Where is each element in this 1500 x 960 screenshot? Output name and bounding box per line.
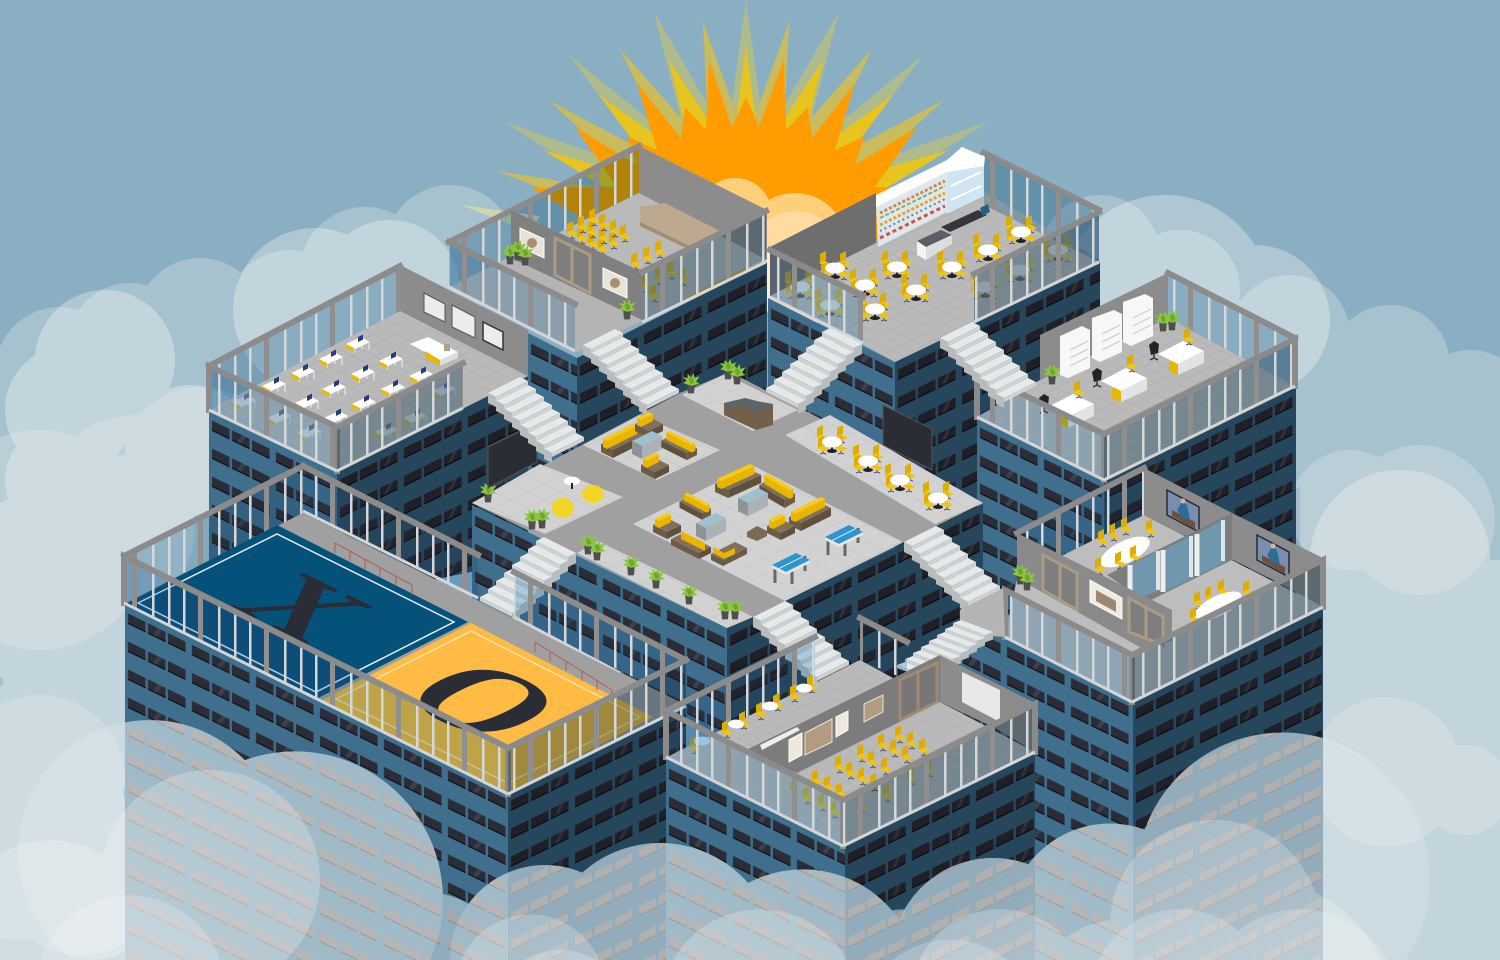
seminar chairs [789,725,936,818]
planter strip [577,541,753,628]
cafe tables [784,215,1074,321]
red safety rail one [335,543,412,595]
short olive rays [497,22,944,224]
plaza plants [480,359,746,619]
left wall [125,603,508,960]
reception desk [724,398,773,430]
office floor [209,311,528,471]
display cabinet [947,147,985,214]
video screen one [1167,490,1199,532]
stairs to seminar block [897,620,993,684]
left wall [666,758,845,960]
back glass railing [124,466,303,603]
back wall [1144,468,1323,607]
roof walkway overlay [283,513,640,692]
sun with rays [461,0,987,326]
back glass [1017,468,1144,578]
stage podium [640,203,722,250]
block: computer office (left) [209,265,528,600]
room two table [1189,579,1254,626]
back wall and whiteboards [400,265,528,376]
right wall of cafe block [895,262,1100,560]
left terrace [472,464,623,534]
back railing [209,266,400,410]
left railing [666,711,843,846]
partition with glazed shelves [1107,513,1232,602]
cafe floor [770,192,1100,362]
room one table [1094,517,1157,575]
orange roof pad [322,623,653,793]
plaza right wall [727,504,983,740]
letter O on roof: O [366,643,602,758]
back wall [1040,273,1168,380]
dining terrace [785,415,983,524]
white desks [1039,327,1204,428]
cafe tables with chairs [689,675,818,754]
right wall [337,376,528,600]
reception desk [410,337,458,366]
terrace table and bean bags [552,476,604,518]
back right railing [984,153,1099,262]
central plaza [472,322,1036,740]
right wall of auditorium block [577,262,767,520]
dark wall panel left [488,423,537,488]
roof walkway [124,513,686,793]
main lounge terrace [633,465,903,601]
main lounge furniture [653,464,831,566]
dining sets [816,425,954,510]
floor [1005,515,1323,702]
orange disc and spikes [532,59,960,300]
back wall [639,146,767,260]
lounge terrace [583,415,720,480]
plants [1012,564,1036,590]
stub glass railing [860,618,907,680]
right wall [845,752,1035,960]
right railing [1104,339,1295,480]
reception terrace [682,374,798,431]
left railing [770,250,863,343]
block: auditorium (back left) [449,146,767,520]
right wall [1104,386,1296,660]
yellow rays [543,45,949,206]
floor [977,318,1296,480]
video screen two [1257,535,1289,577]
inner wall with door and art [511,210,642,320]
plaza left wall [472,505,727,740]
left wall [960,614,1133,960]
computer desks [232,334,456,442]
left front railing [449,242,575,351]
auditorium floor [449,192,767,352]
plants [1044,310,1180,384]
red safety rail two [535,642,612,698]
foreground clouds [0,720,1430,960]
blue roof pad [127,525,468,698]
ping pong tables [772,525,863,584]
rear railing two [514,572,686,704]
block: seminar room (front centre) [666,618,1035,960]
drinks fridge [876,160,947,247]
rear railing one [303,466,478,598]
dark wall panel right [883,405,932,470]
plants on terrace [502,240,636,319]
block: cafe (back right) [768,147,1100,560]
front right railing [337,363,463,471]
right railing [1132,560,1323,702]
stairs set [480,322,1036,687]
seminar room floor [797,702,1035,845]
auditorium seats [566,208,690,302]
back glass railing [449,146,639,287]
left railing [1005,590,1132,702]
right railing [843,704,1035,846]
block: XO roof terrace (front left) [124,466,686,960]
front left railing [124,556,508,794]
pale horizon ray [461,205,540,232]
left wall of cafe block [768,298,895,520]
back railing [1168,273,1295,386]
inner partition wall with pictures [742,655,940,773]
right wall [1133,608,1323,960]
long pale rays [505,0,987,205]
back left glass railing [666,637,815,757]
block: meeting rooms (right front) [897,468,1323,960]
blue pad outline [138,534,454,692]
left railing [977,372,1104,480]
left wall of auditorium block [528,333,577,500]
cafe terrace floor [667,660,940,845]
front left railing [209,366,337,471]
cream glow clouds [698,178,847,326]
white shelving [1060,294,1153,378]
dark back wall [770,193,876,296]
letter X on roof: X [203,558,403,657]
tower fading into cloud layer [125,720,1323,960]
right wall with projection screen [940,655,1035,752]
plaza road surface [472,372,983,628]
right front railing [642,211,766,322]
landing between blocks [960,588,1005,637]
left wall [209,410,337,600]
front right railing [508,660,686,794]
lounge furniture top [601,412,697,479]
orange pad outline [336,631,640,783]
block: archive office (right) [977,273,1296,660]
front railing [974,212,1099,322]
left wall [977,417,1104,660]
right wall [508,705,686,960]
serving counter [917,204,990,260]
front wall with doors and art [1017,533,1172,650]
terrace floor [449,258,642,352]
